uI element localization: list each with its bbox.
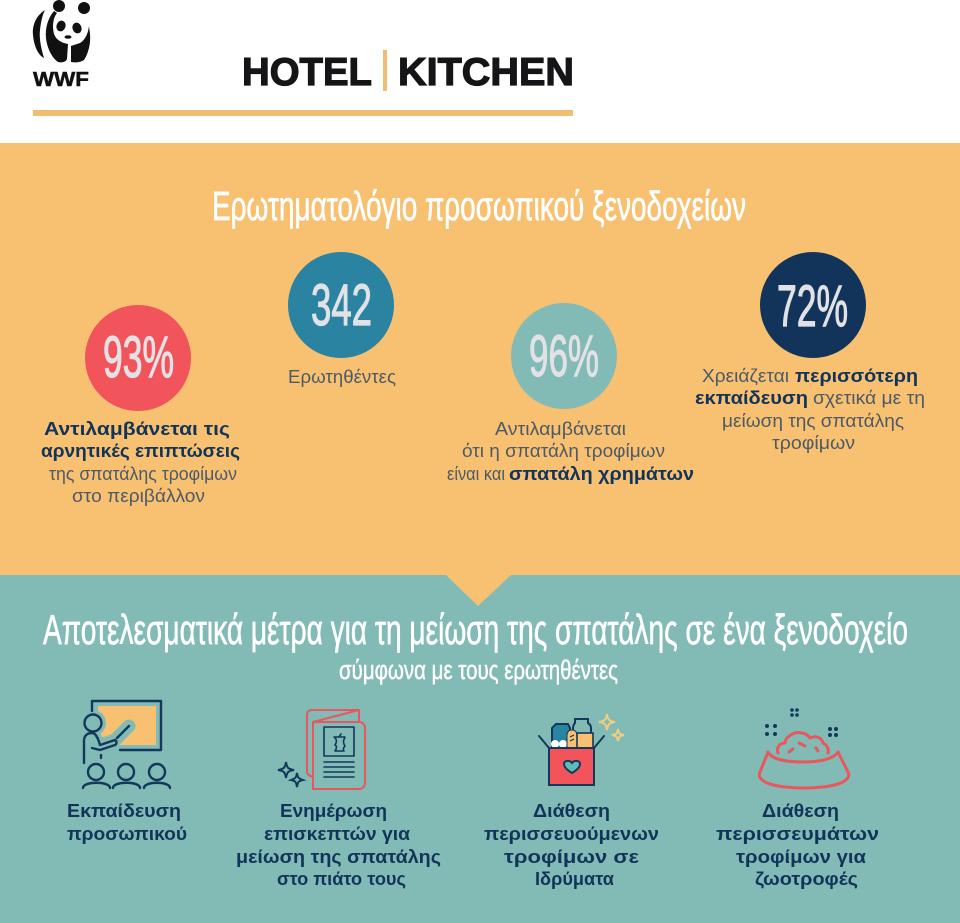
stat: 72%: 72% — [777, 274, 848, 339]
stat: 93%: αρνητικές επιπτώσεις — [41, 441, 240, 461]
icon: WWF panda logo — [33, 0, 90, 91]
stat: 96%: σπατάλη χρημάτων — [509, 464, 694, 484]
title: Hotel Kitchen — [242, 50, 574, 94]
label: Διάθεση — [533, 801, 610, 821]
label: Ιδρύματα — [535, 869, 614, 889]
stat: 96%: ότι η σπατάλη τροφίμων — [462, 441, 665, 461]
label: τροφίμων σε — [504, 847, 640, 867]
stat: 72%: εκπαίδευση — [695, 388, 808, 408]
subheading: σύμφωνα με τους ερωτηθέντες — [339, 655, 618, 685]
panel: effective measures — [0, 575, 960, 923]
label: ζωοτροφές — [755, 869, 858, 890]
icon: presenter and audience — [80, 701, 170, 788]
stat: 93%: 93% — [103, 325, 174, 390]
stat: 93%: Αντιλαμβάνεται τις — [44, 419, 230, 439]
stat: 342: 342 — [311, 273, 372, 338]
icon: leaflet with apple core — [278, 710, 365, 789]
panel: questionnaire — [0, 143, 960, 575]
label: μείωση της σπατάλης — [236, 847, 441, 867]
icon: donation box — [539, 714, 624, 785]
measure: animal feed — [716, 708, 879, 890]
stat: 96% — [447, 303, 694, 484]
label — [716, 801, 879, 890]
icon: WWF panda logo: WWF — [33, 69, 89, 91]
stat: 93%: της σπατάλης τροφίμων — [49, 464, 237, 484]
label — [236, 801, 441, 889]
label: επισκεπτών για — [264, 824, 410, 844]
measure: donate to charities — [484, 714, 659, 889]
stat: 93% — [41, 305, 240, 506]
label: περισσευμάτων — [716, 824, 879, 844]
label — [484, 801, 659, 889]
label: προσωπικού — [67, 824, 187, 844]
title: Hotel Kitchen: KITCHEN — [398, 51, 574, 94]
stat: 342 — [288, 252, 396, 387]
label: περισσευούμενων — [484, 824, 659, 844]
label — [67, 801, 187, 844]
stat: 93%: στο περιβάλλον — [72, 486, 205, 506]
stat: 342: Ερωτηθέντες — [288, 367, 396, 387]
stat: 72%: Χρειάζεται — [702, 366, 789, 386]
stat: 72%: σχετικά με τη — [813, 388, 925, 408]
stat: 72%: μείωση της σπατάλης — [722, 411, 904, 431]
stat: 72%: περισσότερη — [795, 366, 918, 386]
header rule — [33, 110, 573, 116]
icon: bowl — [759, 708, 849, 788]
stat: 72% — [695, 252, 925, 453]
stat: 96%: είναι και — [447, 464, 505, 484]
pointer arrow — [446, 575, 511, 606]
measure: inform guests — [236, 710, 441, 889]
measure: staff training — [67, 701, 187, 844]
label: Ενημέρωση — [280, 801, 387, 821]
title: Hotel Kitchen: HOTEL — [242, 51, 372, 94]
label: τροφίμων για — [736, 847, 866, 867]
label: στο πιάτο τους — [277, 869, 406, 889]
stat: 72%: τροφίμων — [772, 433, 855, 453]
label: Εκπαίδευση — [67, 801, 181, 821]
label: Διάθεση — [762, 801, 839, 821]
stat: 96%: Αντιλαμβάνεται — [495, 419, 626, 439]
stat: 96%: 96% — [529, 324, 599, 389]
